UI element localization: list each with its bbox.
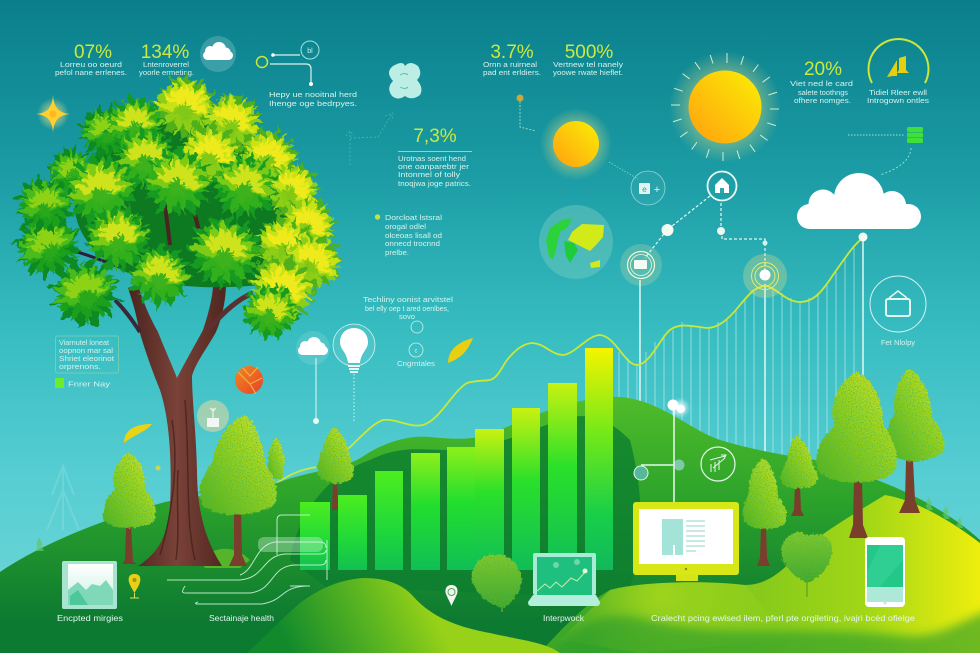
bar chart <box>300 348 613 570</box>
stat: 07%: 07% <box>74 42 112 63</box>
glowing star <box>36 95 70 133</box>
middle tree <box>200 415 277 515</box>
canopy dark mass <box>75 121 313 287</box>
dark hollow behind bars <box>290 416 641 600</box>
gauge icon with caption: Tidiel Rleer ewll <box>869 88 927 97</box>
stat: 3.7% <box>483 42 541 77</box>
stat: 500%: yoowe rwate hieflet. <box>553 68 623 77</box>
phone <box>865 537 905 607</box>
leaf clusters <box>0 65 359 350</box>
connector diagram with caption: bl <box>307 48 313 55</box>
right trees <box>743 458 787 529</box>
gauge icon with caption: Introgown ontles <box>867 96 929 105</box>
big tree canopy <box>0 65 359 350</box>
faint arrow tree silhouette <box>47 466 79 530</box>
stat: 500%: 500% <box>565 42 613 63</box>
text box with legend: Viarnutel loneat <box>59 338 110 347</box>
small circles with caption: c <box>414 348 418 354</box>
icon: light bulb <box>333 324 375 421</box>
small sun with dotted pointer <box>516 94 612 180</box>
label: health: Sectainaje health <box>209 613 274 623</box>
bottom shade on right hill <box>540 610 980 653</box>
curve end dot <box>858 232 868 242</box>
yellow leaf right <box>448 338 473 363</box>
vertical light lines under growth curve <box>619 245 854 476</box>
lime glow on right hill <box>560 582 790 653</box>
tiny saplings <box>36 497 963 551</box>
stat: 7,3% with rule and paragraph: Intonmel of tolly <box>398 170 460 179</box>
bullet paragraph: Dorcloat lstsral <box>385 213 442 222</box>
text box with legend: Fnrer Nay <box>68 380 110 388</box>
globe <box>539 205 613 279</box>
text block: techliny: Techliny oonist arvitstel <box>363 295 453 304</box>
stat: 134% <box>139 42 194 77</box>
inner branches <box>165 205 200 245</box>
stat: 07%: pefol nane errlenes. <box>55 68 127 77</box>
connector diagram with caption <box>256 41 357 108</box>
ring node with glow <box>743 254 787 298</box>
text box with legend: Shriet eleorinot <box>59 354 115 363</box>
ring node with chat icon <box>620 244 662 286</box>
text block: techliny <box>363 295 453 321</box>
bullet paragraph: prelbe. <box>385 248 409 257</box>
lime right hill <box>540 495 980 653</box>
stat: 3.7%: 3.7% <box>490 42 534 63</box>
bush center bottom <box>472 554 522 612</box>
stat: 20%: ofhere nomges. <box>794 96 851 105</box>
stat: 134%: yoorle ermeting. <box>139 68 194 77</box>
stat: 7,3% with rule and paragraph: tnoqjwa joge patrics. <box>398 179 471 188</box>
text block: techliny: sovo <box>399 312 415 321</box>
tree on dark hill <box>317 427 354 483</box>
small circles with caption <box>397 321 435 368</box>
monitor <box>633 502 739 581</box>
bullet paragraph: orogal odlel <box>385 222 426 231</box>
center lime hill <box>247 578 560 653</box>
translucent band <box>258 537 323 552</box>
text block: techliny: bel elly oep t ared oenlbes, <box>365 304 449 313</box>
icon: badge at sun: + <box>654 184 660 196</box>
gauge icon with caption <box>867 39 929 105</box>
stat: 20%: salete toothngs <box>798 88 848 97</box>
stat: 7,3% with rule and paragraph <box>398 126 472 188</box>
bullet paragraph <box>375 213 442 257</box>
icon: frame circle with caption <box>870 276 926 347</box>
connector diagram with caption: Hepy ue nooitnal herd <box>269 90 357 99</box>
stat: 134%: Lntenroverrel <box>143 60 189 69</box>
icon: badge at sun: e <box>642 185 647 194</box>
big sun with rays <box>669 51 781 163</box>
stat: 7,3% with rule and paragraph: one oanparebtr jer <box>398 162 470 171</box>
text box with legend: orprenons. <box>59 362 101 371</box>
stat: 20%: Viet ned le card <box>790 79 853 88</box>
stat: 3.7%: pad ent erldiers. <box>483 68 541 77</box>
yellow growth curve <box>277 238 863 483</box>
back hill <box>0 397 980 653</box>
yellow leaf left <box>124 424 152 443</box>
label: bottom caption: Cralecht pcing ewlsed ilem, pferl pte orgileting, ivajri bcéd ofielge <box>651 613 915 623</box>
bullet paragraph: olceoas lisall od <box>385 231 442 240</box>
small circles with caption: Cngrntales <box>397 359 435 368</box>
stat: 500% <box>553 42 623 77</box>
mountain image widget <box>62 561 117 609</box>
light patch near trunk base <box>200 549 250 568</box>
icon: small cloud with stem <box>296 331 330 424</box>
small yellow dot <box>156 466 160 470</box>
bush on right hill <box>781 532 832 597</box>
stat: 7,3% with rule and paragraph: 7,3% <box>413 126 457 147</box>
faint arrow graphic upper middle <box>346 113 393 165</box>
bold vertical connector lines <box>640 240 863 473</box>
bullet paragraph: onnecd trocnnd <box>385 239 440 248</box>
stat: 20%: 20% <box>804 59 842 80</box>
icon: sprout badge <box>197 400 229 432</box>
icon: cloud badge <box>200 36 236 72</box>
small nodes on hill <box>634 398 690 503</box>
icon: yellow map pin <box>129 574 140 598</box>
stat: 3.7%: Ornn a ruirneal <box>483 60 537 69</box>
lime tree left of trunk <box>103 453 155 528</box>
label: encpted migries: Encpted mirgies <box>57 613 123 623</box>
stat: 20% <box>790 59 853 105</box>
label: interpwock: Interpwock <box>543 613 585 623</box>
icon: white map pin <box>445 585 458 606</box>
dark trees trunks <box>122 460 920 566</box>
green stack icon with dotted path <box>848 127 923 175</box>
icon: puzzle cross <box>389 63 421 98</box>
icon: orange ball <box>235 366 263 394</box>
stat: 07% <box>55 42 127 77</box>
connector diagram with caption: Ihenge oge bedrpyes. <box>269 99 357 108</box>
stat: 500%: Vertnew tel nanely <box>553 60 623 69</box>
text box with legend: oopnon mar sal <box>59 346 113 355</box>
big tree trunk and branches <box>70 250 253 566</box>
stat: 7,3% with rule and paragraph: Urotnas soent hend <box>398 154 466 163</box>
large cloud <box>797 173 921 229</box>
small tree behind middle tree <box>268 438 284 479</box>
laptop <box>528 553 600 606</box>
wavy flow lines <box>167 515 327 604</box>
icon: badge at sun <box>609 162 665 205</box>
stat: 07%: Lorreu oo oeurd <box>60 60 122 69</box>
icon: chart circle on hill <box>701 447 735 481</box>
stat: 134%: 134% <box>141 42 189 63</box>
icon: frame circle with caption: Fet Nlolpy <box>881 338 915 347</box>
icon: house node with dashed connectors <box>645 172 768 270</box>
text box with legend <box>55 336 118 388</box>
